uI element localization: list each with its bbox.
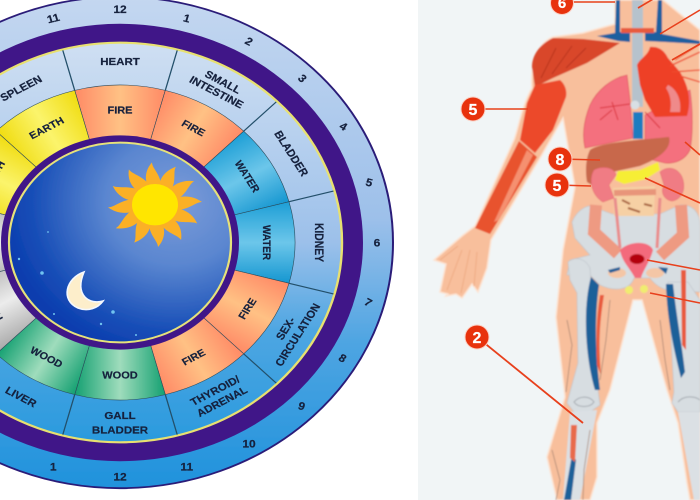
organ labels: LIVER	[3, 385, 38, 410]
right tibia	[678, 412, 700, 500]
callout badge 8: 8	[556, 152, 565, 169]
hour numbers: 7	[362, 297, 374, 310]
hour numbers: 3	[295, 73, 309, 85]
bronchi vein	[633, 112, 643, 139]
callout badge 8	[548, 147, 572, 171]
organ labels: SEX-	[274, 315, 299, 342]
element labels: WATER	[232, 159, 261, 195]
hour numbers: 1	[182, 13, 192, 26]
organ labels: ADRENAL	[195, 384, 250, 420]
icon: moon	[67, 272, 103, 310]
element labels: FIRE	[237, 297, 260, 322]
element labels: WOOD	[28, 346, 65, 371]
panel: body clock wheel	[0, 0, 393, 488]
hour numbers: 1	[50, 462, 57, 473]
organ labels: CIRCULATION	[273, 302, 323, 369]
heart arteries	[670, 44, 700, 82]
organ labels: THYROID/	[188, 374, 242, 409]
bronchial branches	[600, 102, 660, 128]
element wedges	[0, 85, 295, 400]
liver	[586, 137, 669, 190]
left tibia	[563, 410, 597, 500]
hour numbers: 10	[242, 439, 256, 450]
hour numbers: 8	[336, 353, 348, 365]
callout lines	[473, 0, 700, 423]
organ labels: HEART	[100, 57, 140, 68]
icon: stars	[18, 231, 137, 336]
inner purple ring	[1, 135, 239, 350]
knee joint outlines	[574, 397, 700, 406]
callout badge 5 upper: 5	[469, 102, 478, 119]
hour numbers: 11	[46, 12, 62, 26]
element labels: FIRE	[179, 119, 207, 139]
neck and shoulder veins	[597, 0, 700, 44]
purple band	[0, 24, 363, 461]
hour numbers: 6	[374, 238, 380, 249]
element labels: WATER	[260, 225, 272, 260]
kidneys	[591, 168, 684, 202]
organ labels: GALL	[104, 410, 136, 422]
element labels: WOOD	[102, 371, 138, 381]
forearm muscle	[475, 141, 537, 234]
body silhouette	[434, 0, 700, 500]
ureters	[615, 198, 660, 248]
intestines	[613, 186, 655, 216]
element labels: FIRE	[107, 106, 133, 117]
organ ring	[0, 43, 342, 442]
anatomy figure	[434, 0, 700, 500]
colon	[594, 205, 683, 256]
organ labels: SMALL	[202, 69, 243, 97]
heart	[637, 47, 689, 117]
pelvic openings	[608, 268, 626, 278]
trachea	[632, 0, 643, 107]
callout badge 5 lower: 5	[553, 178, 562, 195]
pancreas	[615, 162, 660, 184]
bladder	[620, 243, 653, 278]
organ labels: BLADDER	[92, 425, 148, 436]
yellow glands	[625, 286, 633, 294]
hour numbers: 2	[242, 36, 255, 49]
organ labels: BLADDER	[271, 129, 310, 179]
organ labels: KIDNEY	[312, 223, 324, 263]
hour numbers: 12	[113, 472, 127, 483]
organ labels: INTESTINE	[187, 74, 245, 111]
callout badge 5 lower	[545, 173, 569, 197]
callout badge 2	[465, 325, 489, 349]
outer hour ring	[0, 0, 393, 488]
element labels	[0, 106, 272, 381]
hour numbers	[0, 5, 380, 483]
element labels: EARTH	[28, 116, 66, 142]
biceps muscle	[520, 80, 566, 153]
hour numbers: 5	[364, 177, 374, 190]
deltoid muscle	[532, 38, 620, 87]
organ labels	[0, 57, 324, 436]
hour numbers: 4	[337, 121, 350, 134]
capillaries	[552, 300, 670, 500]
callout badge 6	[550, 0, 574, 14]
callout badge 5 upper	[461, 97, 485, 121]
left femur	[567, 259, 600, 412]
panel: body background	[418, 0, 700, 500]
element labels: FIRE	[180, 348, 208, 368]
hour numbers: 9	[297, 401, 306, 413]
pelvis bones	[567, 205, 700, 292]
night and day disc	[9, 143, 231, 342]
icon: sun	[108, 162, 202, 247]
callout badge 2: 2	[473, 330, 482, 347]
lungs	[584, 75, 692, 163]
hour numbers: 12	[113, 5, 127, 16]
leg veins	[586, 277, 600, 390]
hour numbers: 11	[180, 462, 194, 473]
right femur	[668, 282, 700, 412]
hand fingers	[440, 246, 477, 293]
